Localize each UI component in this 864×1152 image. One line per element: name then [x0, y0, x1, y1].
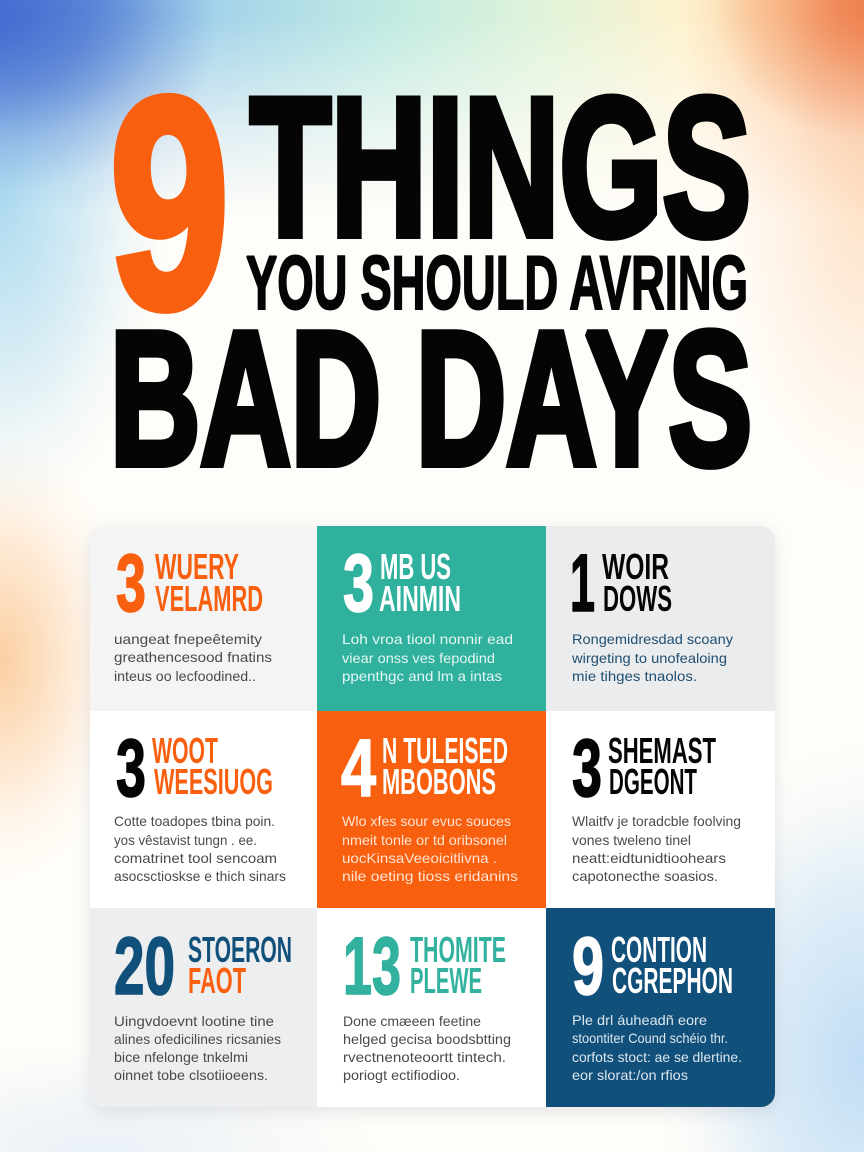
- cell: WOOT WEESIUOG: WEESIUOG: [154, 761, 273, 802]
- cell: WOOT WEESIUOG: [114, 738, 286, 881]
- cell: SHEMAST DGEONT: 3: [572, 723, 602, 814]
- cell: SHEMAST DGEONT: neatt:eidtunidtioohears: [572, 850, 726, 866]
- cell: WUERY VELAMRD: inteus oo lecfoodined..: [114, 668, 256, 684]
- title: big number 9: 9: [110, 37, 229, 370]
- cell: STOERON FAOT: STOERON: [188, 929, 292, 970]
- cell: MB US AINMIN: Loh vroa tiool nonnir ead: [342, 631, 513, 647]
- cell: THOMITE PLEWE: PLEWE: [410, 960, 482, 1001]
- cell: WUERY VELAMRD: [90, 526, 317, 711]
- cell: N TULEISED MBOBONS: 4: [341, 723, 376, 814]
- cell: STOERON FAOT: oinnet tobe clsotiioeens.: [114, 1067, 268, 1083]
- cell: WOOT WEESIUOG: 3: [116, 723, 146, 814]
- cell: MB US AINMIN: viear onss ves fepodind: [342, 650, 495, 666]
- cell: SHEMAST DGEONT: vones tweleno tinel: [572, 832, 691, 848]
- cell: WOIR DOWS: WOIR: [602, 546, 669, 587]
- cell: N TULEISED MBOBONS: MBOBONS: [382, 761, 496, 802]
- cell: CONTION CGREPHON: CGREPHON: [612, 960, 733, 1001]
- cell: WOIR DOWS: mie tihges tnaolos.: [572, 668, 697, 684]
- cell: N TULEISED MBOBONS: [317, 711, 546, 908]
- cell: WUERY VELAMRD: 3: [116, 538, 146, 629]
- cell: WOOT WEESIUOG: asocsctioskse e thich sinars: [114, 868, 286, 884]
- cell: CONTION CGREPHON: Ple drl áuheadñ eore: [572, 1012, 707, 1028]
- cell: CONTION CGREPHON: [546, 908, 775, 1107]
- cell: WOOT WEESIUOG: WOOT: [152, 730, 218, 771]
- cell: MB US AINMIN: 3: [343, 538, 374, 629]
- cell: STOERON FAOT: FAOT: [188, 960, 246, 1001]
- cell: N TULEISED MBOBONS: nile oeting tioss eridanins: [342, 868, 518, 884]
- cell: WUERY VELAMRD: uangeat fnepeêtemity: [114, 631, 262, 647]
- cell: STOERON FAOT: Uingvdoevnt lootine tine: [114, 1013, 274, 1029]
- cell: CONTION CGREPHON: eor slorat:/on rfios: [572, 1067, 688, 1083]
- cell: SHEMAST DGEONT: capotonecthe soasios.: [572, 868, 718, 884]
- cell: WOIR DOWS: wirgeting to unofealoing: [571, 650, 727, 666]
- title: [110, 37, 752, 505]
- cell: SHEMAST DGEONT: [572, 738, 740, 884]
- cell: WOOT WEESIUOG: yos vêstavist tungn . ee.: [114, 832, 257, 848]
- cell: CONTION CGREPHON: stoontiter Cound schéio thr.: [572, 1030, 728, 1046]
- cell: WUERY VELAMRD: WUERY: [155, 546, 239, 587]
- cell: SHEMAST DGEONT: Wlaitfv je toradcble foolving: [572, 813, 741, 829]
- cell: CONTION CGREPHON: CONTION: [611, 929, 707, 970]
- cell: THOMITE PLEWE: helged gecisa boodsbtting: [343, 1031, 511, 1047]
- cell: WOIR DOWS: [546, 526, 775, 711]
- cell: STOERON FAOT: alines ofedicilines ricsanies: [114, 1031, 281, 1047]
- cell: THOMITE PLEWE: THOMITE: [410, 929, 506, 970]
- cell: MB US AINMIN: AINMIN: [379, 578, 461, 619]
- cell: WOIR DOWS: Rongemidresdad scoany: [572, 631, 733, 647]
- cell: MB US AINMIN: ppenthgc and lm a intas: [342, 668, 502, 684]
- cell: WOOT WEESIUOG: comatrinet tool sencoam: [114, 850, 277, 866]
- cell: N TULEISED MBOBONS: nmeit tonle or td oribsonel: [342, 832, 507, 848]
- cell: THOMITE PLEWE: Done cmæeen feetine: [343, 1013, 481, 1029]
- panel: card grid: [90, 526, 775, 1107]
- cell: THOMITE PLEWE: [344, 936, 510, 1083]
- cell: WOIR DOWS: DOWS: [603, 578, 672, 619]
- cell: SHEMAST DGEONT: DGEONT: [609, 761, 697, 802]
- cell: WOIR DOWS: 1: [570, 538, 595, 629]
- cell: WOOT WEESIUOG: Cotte toadopes tbina poin.: [114, 813, 275, 829]
- cell: SHEMAST DGEONT: SHEMAST: [608, 730, 716, 771]
- cell: THOMITE PLEWE: rvectnenoteoortt tintech.: [343, 1049, 506, 1065]
- cell: N TULEISED MBOBONS: Wlo xfes sour evuc souces: [342, 813, 511, 829]
- cell: CONTION CGREPHON: corfots stoct: ae se dlertine.: [572, 1049, 742, 1065]
- cell: WUERY VELAMRD: greathencesood fnatins: [114, 649, 272, 665]
- cell: THOMITE PLEWE: poriogt ectifiodioo.: [343, 1067, 460, 1083]
- cell: STOERON FAOT: bice nfelonge tnkelmi: [114, 1049, 248, 1065]
- cell: STOERON FAOT: 20: [114, 921, 175, 1012]
- cell: N TULEISED MBOBONS: uocKinsaVeeoicitlivna .: [342, 850, 497, 866]
- cell: N TULEISED MBOBONS: N TULEISED: [382, 730, 508, 771]
- cell: WUERY VELAMRD: VELAMRD: [155, 578, 263, 619]
- cell: MB US AINMIN: MB US: [380, 546, 451, 587]
- cell: STOERON FAOT: [90, 908, 317, 1107]
- cell: THOMITE PLEWE: 13: [343, 921, 401, 1012]
- cell: MB US AINMIN: [317, 526, 546, 711]
- cell: CONTION CGREPHON: 9: [572, 921, 604, 1012]
